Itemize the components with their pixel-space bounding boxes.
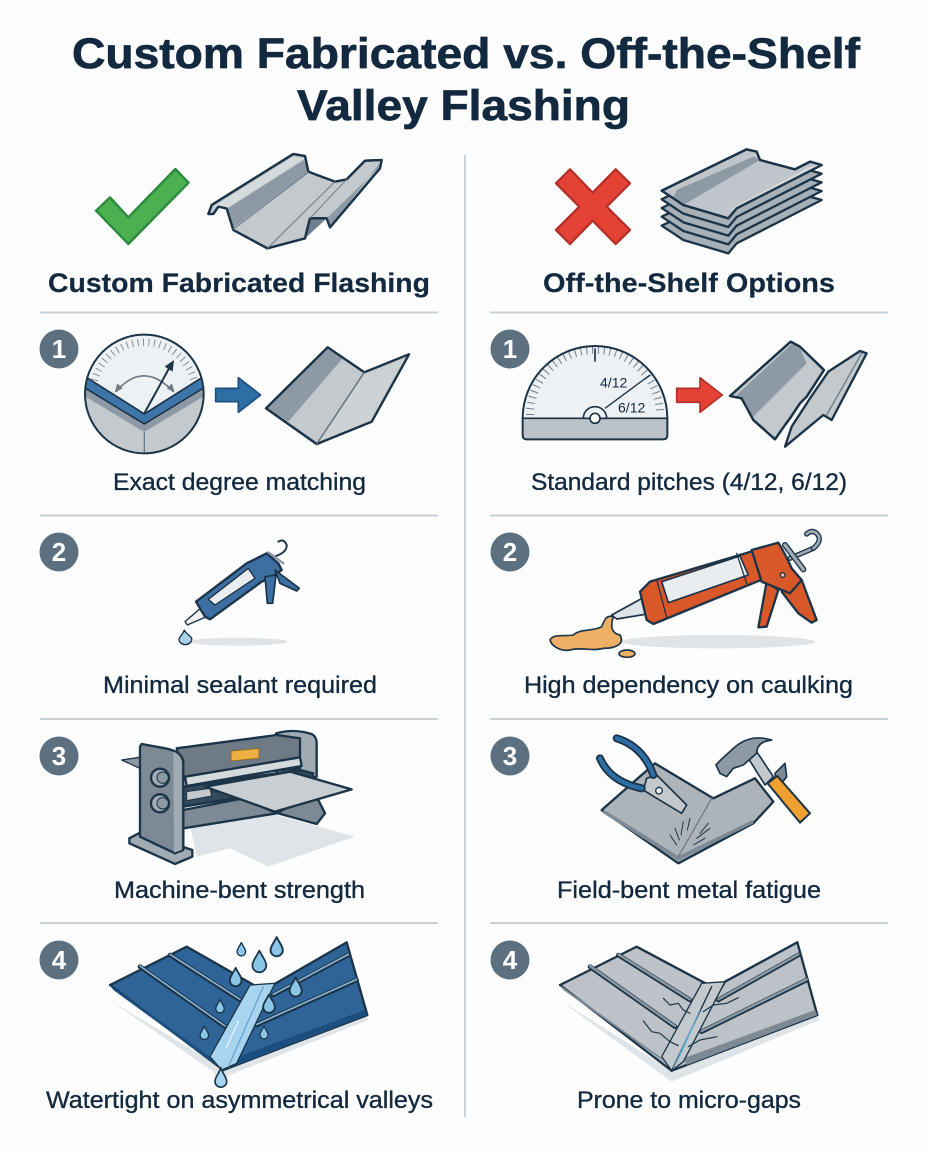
- icon: red x mark: [556, 169, 630, 244]
- badge 1: [490, 330, 530, 368]
- badge 4: [40, 940, 78, 980]
- caption: Field-bent metal fatigue: [557, 877, 821, 904]
- panel: off-the-shelf options: [490, 149, 867, 1114]
- row 1: exact degree matching: [40, 330, 409, 496]
- caption: Minimal sealant required: [103, 672, 377, 699]
- caption: Standard pitches (4/12, 6/12): [531, 469, 847, 496]
- icon: pitch protractor: [523, 346, 667, 439]
- caption: Watertight on asymmetrical valleys: [46, 1087, 433, 1114]
- title: Custom Fabricated vs. Off-the-Shelf: [72, 30, 861, 78]
- badge 2: 2: [52, 537, 66, 567]
- row 4: watertight: [40, 937, 433, 1114]
- icon: gray valley with cracks: [559, 942, 819, 1082]
- caption: High dependency on caulking: [524, 672, 853, 699]
- icon: pitch protractor: 6/12: [618, 400, 645, 415]
- icon: blue valley with water channel: [109, 937, 368, 1087]
- icon: large orange caulk gun: [550, 531, 819, 657]
- row 4: micro gaps: [490, 940, 819, 1114]
- badge 3: [490, 736, 530, 776]
- row 3: machine-bent: [40, 731, 365, 904]
- badge 2: [490, 532, 530, 572]
- panel: custom fabricated flashing: [40, 154, 433, 1114]
- arrow: red: [677, 378, 722, 412]
- badge 4: 4: [52, 945, 67, 975]
- title: Valley Flashing: [297, 82, 630, 130]
- icon: small blue caulk gun: [179, 541, 299, 646]
- badge 1: 1: [503, 334, 517, 364]
- heading: off-the-shelf options: Off-the-Shelf Options: [543, 268, 835, 298]
- icon: custom flashing profile: [208, 154, 382, 248]
- icon: stack of flashing: [662, 149, 822, 253]
- badge 3: [40, 736, 78, 776]
- badge 1: 1: [52, 334, 66, 364]
- row 2: minimal sealant: [40, 532, 377, 699]
- row 1: standard pitches: [490, 330, 867, 496]
- heading: custom fabricated flashing: Custom Fabricated Flashing: [48, 268, 430, 298]
- icon: sheet metal bending machine: [122, 731, 355, 867]
- icon: pliers, hammer and bent sheet: [600, 738, 810, 863]
- row 2: high caulk dependency: [490, 531, 853, 699]
- badge 2: 2: [503, 537, 517, 567]
- badge 1: [40, 330, 78, 368]
- icon: broken flashing: [730, 342, 867, 447]
- badge 4: 4: [503, 945, 518, 975]
- icon: green check mark: [96, 169, 189, 244]
- icon: pitch protractor: 4/12: [600, 375, 627, 390]
- caption: Prone to micro-gaps: [577, 1087, 801, 1114]
- badge 4: [490, 940, 530, 980]
- caption: Exact degree matching: [113, 469, 366, 496]
- row 3: field bent: [490, 736, 821, 904]
- icon: flat custom flashing: [266, 347, 409, 444]
- badge 3: 3: [52, 741, 66, 771]
- badge 2: [40, 532, 78, 572]
- title: [72, 30, 861, 130]
- arrow: blue: [216, 378, 261, 412]
- badge 3: 3: [503, 741, 517, 771]
- caption: Machine-bent strength: [114, 877, 365, 904]
- icon: angle gauge: [80, 335, 209, 460]
